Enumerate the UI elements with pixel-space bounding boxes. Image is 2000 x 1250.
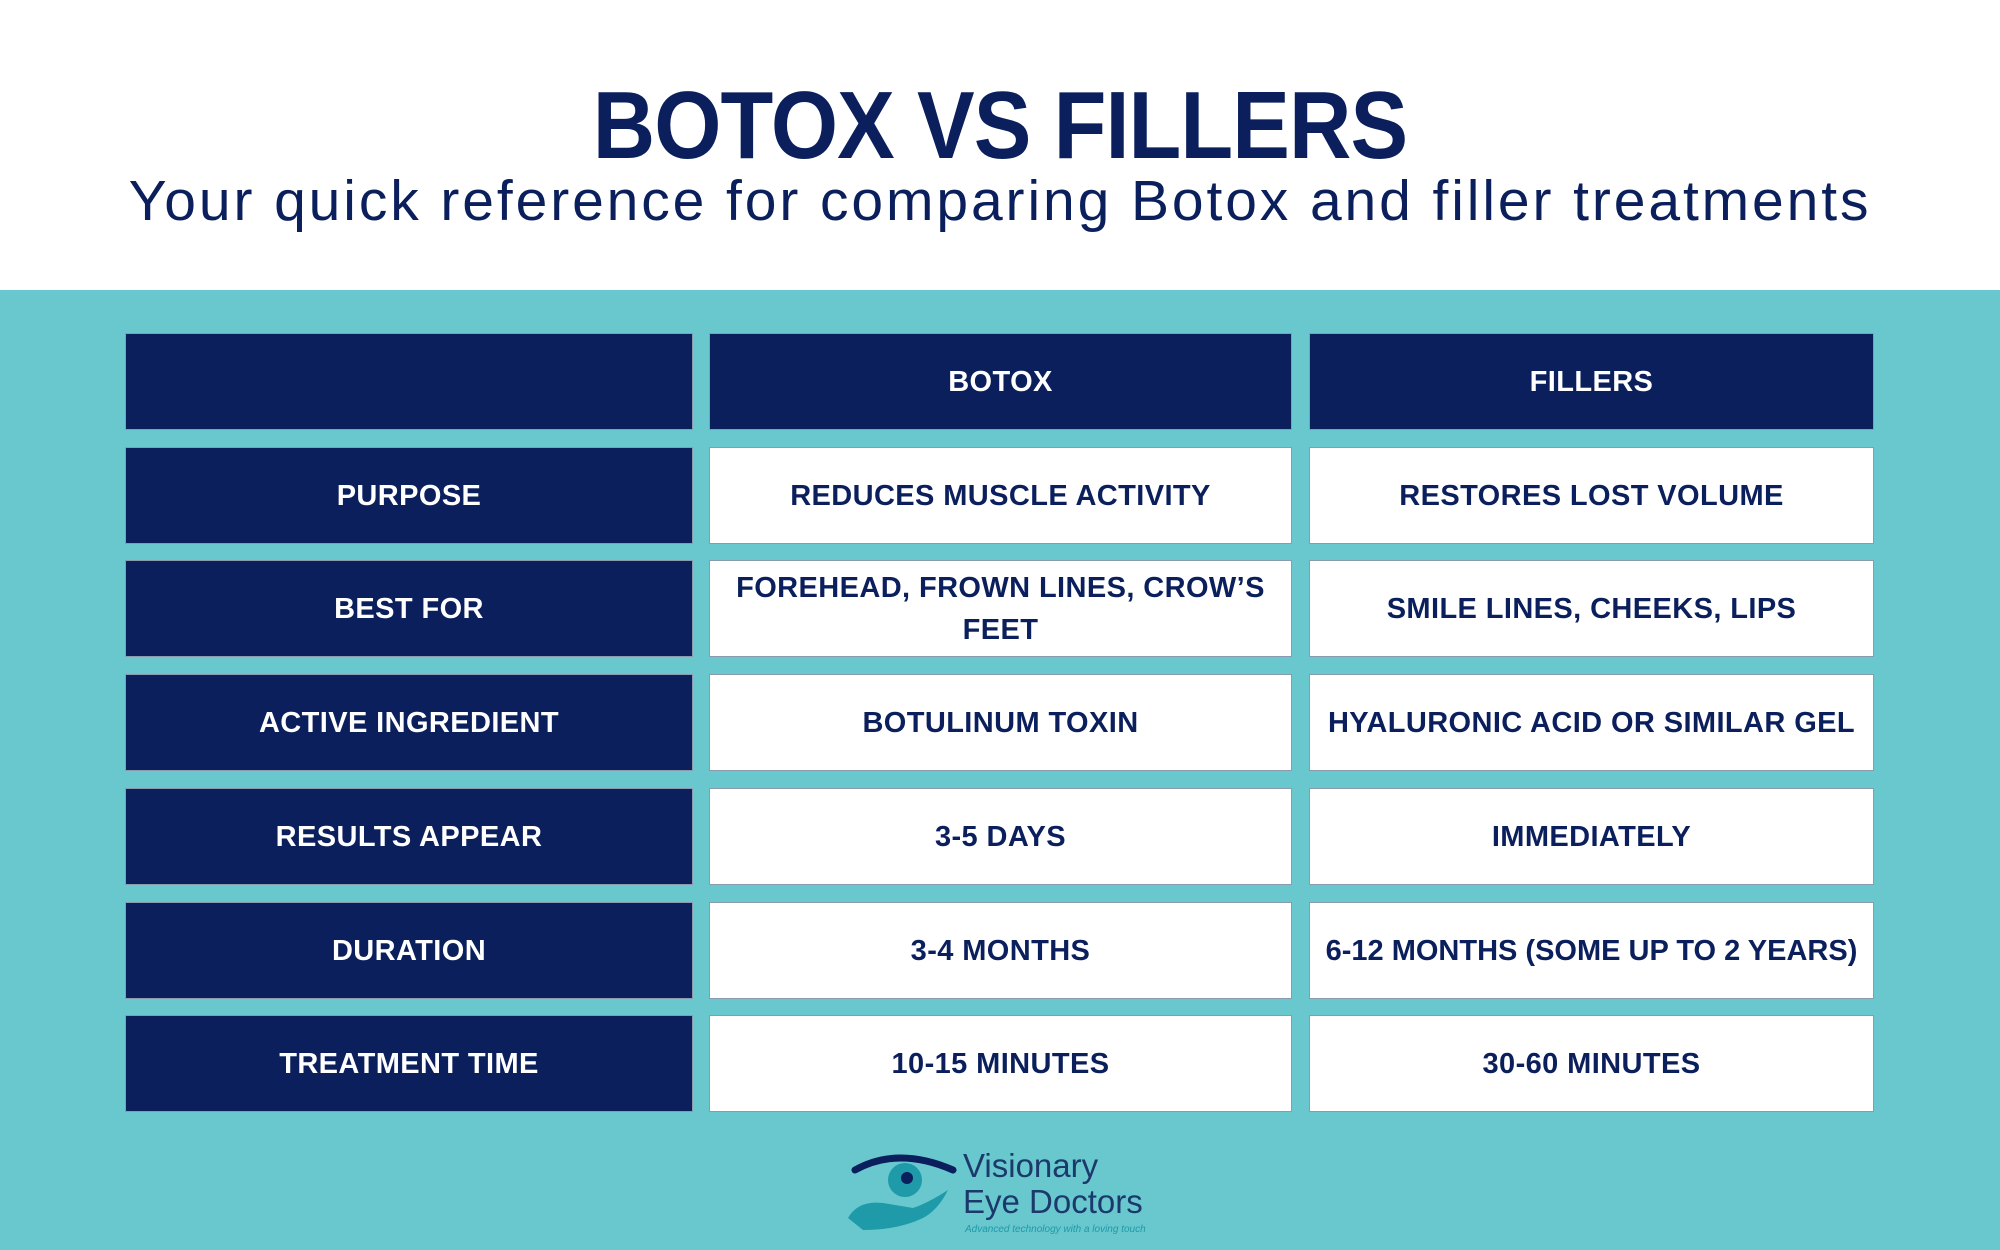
row: purpose: PURPOSE [337, 480, 481, 512]
row: results appear [125, 788, 693, 885]
subtitle: Your quick reference for comparing Botox and filler treatments [129, 169, 1871, 233]
row: purpose [125, 447, 693, 544]
comparison table: SMILE LINES, CHEEKS, LIPS [1387, 592, 1796, 624]
comparison table: BOTOX [948, 366, 1053, 398]
comparison table: BOTULINUM TOXIN [862, 706, 1139, 738]
icon: eye and hand [848, 1154, 956, 1230]
comparison table: FILLERS [1530, 366, 1653, 398]
row: best for: BEST FOR [334, 592, 484, 624]
row: active ingredient [125, 674, 693, 771]
row: treatment time: TREATMENT TIME [279, 1048, 539, 1080]
row: best for [125, 560, 693, 657]
row: active ingredient: ACTIVE INGREDIENT [259, 706, 559, 738]
comparison table: FOREHEAD, FROWN LINES, CROW’S [736, 572, 1265, 604]
brand name [963, 1147, 1143, 1220]
row: duration: DURATION [332, 934, 486, 966]
title: BOTOX VS FILLERS [593, 72, 1407, 179]
comparison table: 3-5 DAYS [935, 820, 1066, 852]
comparison table: 10-15 MINUTES [892, 1048, 1109, 1080]
row: treatment time [125, 1015, 693, 1112]
brand name: Visionary [963, 1147, 1098, 1184]
row: duration [125, 902, 693, 999]
logo [848, 1147, 1146, 1235]
tagline: Advanced technology with a loving touch [965, 1224, 1146, 1235]
comparison table: 30-60 MINUTES [1483, 1048, 1700, 1080]
teal background panel [0, 290, 2000, 1250]
comparison table: HYALURONIC ACID OR SIMILAR GEL [1328, 706, 1855, 738]
comparison table: REDUCES MUSCLE ACTIVITY [790, 480, 1211, 512]
row: results appear: RESULTS APPEAR [276, 820, 542, 852]
comparison table: IMMEDIATELY [1492, 820, 1691, 852]
brand name: Eye Doctors [963, 1183, 1143, 1220]
comparison table: 6-12 MONTHS (SOME UP TO 2 YEARS) [1326, 934, 1857, 966]
comparison table: FEET [963, 614, 1038, 646]
comparison table: RESTORES LOST VOLUME [1399, 480, 1784, 512]
header row [125, 333, 693, 430]
comparison table: 3-4 MONTHS [911, 934, 1090, 966]
